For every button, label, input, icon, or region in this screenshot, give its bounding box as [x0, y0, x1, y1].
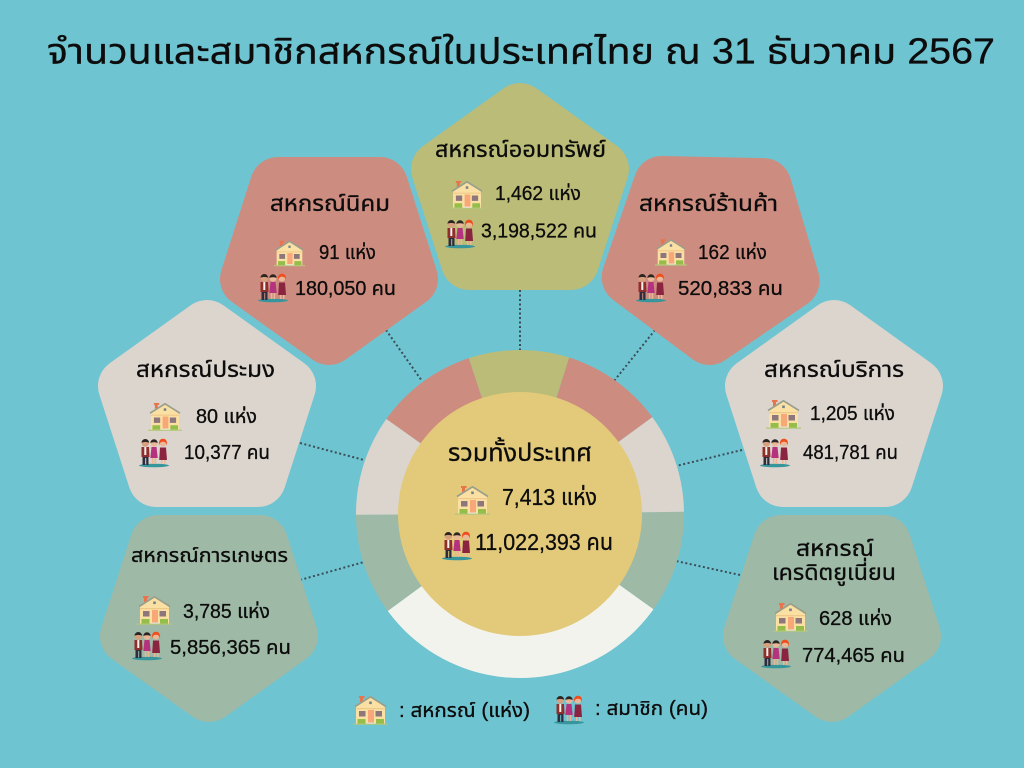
count: members: 5,856,365 คน [170, 637, 291, 659]
legend [353, 696, 708, 725]
ring chart [356, 350, 684, 678]
icon: house [353, 696, 388, 725]
icon: people [445, 220, 475, 248]
icon: house [450, 181, 484, 209]
icon: house [274, 241, 305, 266]
icon: house [137, 596, 172, 625]
legend label: members: : สมาชิก (คน) [595, 698, 708, 720]
icon: people [258, 274, 288, 302]
count: members: 3,198,522 คน [481, 220, 597, 242]
pentagon [128, 543, 290, 694]
count: members: 180,050 คน [295, 278, 396, 300]
heading: สหกรณ์การเกษตร [131, 545, 288, 567]
ring segment: red right [556, 358, 652, 442]
count: cooperatives: 7,413 แห่ง [502, 484, 597, 510]
icon: people [132, 632, 162, 660]
pentagon [439, 111, 601, 262]
icon: people [636, 274, 666, 302]
ring segment: green left [356, 514, 422, 611]
icon: people [442, 532, 472, 560]
heading: สหกรณ์นิคม [270, 191, 390, 216]
pentagon [628, 183, 794, 339]
panel: service cooperative [753, 328, 915, 479]
icon: house [148, 403, 182, 431]
pentagon [126, 328, 288, 479]
panel: credit union cooperative [751, 536, 913, 694]
count: members: 774,465 คน [802, 645, 905, 667]
icon: house [655, 239, 687, 266]
icon: house [766, 400, 801, 429]
connector lines [300, 290, 742, 580]
panel: settlement cooperative [248, 185, 410, 337]
heading: รวมทั้งประเทศ [448, 436, 592, 467]
panel: savings cooperative [435, 111, 606, 262]
icon: people [761, 640, 791, 668]
count: cooperatives: 80 แห่ง [196, 405, 257, 428]
heading: สหกรณ์ประมง [136, 357, 275, 382]
panel: agricultural cooperative [128, 543, 291, 694]
heading line 1: สหกรณ์ [796, 536, 874, 561]
count: cooperatives: 162 แห่ง [698, 241, 767, 264]
pentagon [248, 185, 410, 337]
heading: สหกรณ์ร้านค้า [639, 191, 778, 216]
icon: house [773, 603, 808, 632]
legend label: cooperatives: : สหกรณ์ (แห่ง) [399, 699, 530, 722]
icon: people [554, 696, 584, 724]
ring segment: olive [468, 350, 569, 398]
count: cooperatives: 1,462 แห่ง [495, 182, 581, 205]
ring segment: gray left [356, 419, 420, 515]
count: cooperatives: 1,205 แห่ง [810, 402, 895, 425]
icon: house [455, 486, 490, 515]
heading: สหกรณ์ออมทรัพย์ [435, 137, 606, 162]
count: cooperatives: 91 แห่ง [319, 241, 376, 264]
count: members: 520,833 คน [678, 278, 783, 300]
count: cooperatives: 3,785 แห่ง [183, 600, 270, 623]
icon: people [760, 439, 790, 467]
icon: people [139, 439, 169, 467]
panel: national total [398, 392, 642, 636]
heading: สหกรณ์บริการ [764, 357, 904, 382]
panel: fisheries cooperative [126, 328, 288, 479]
ring segment: gray right [618, 417, 684, 512]
ring segment: green right [620, 512, 684, 609]
count: members: 481,781 คน [803, 442, 898, 464]
panel: store cooperative [628, 183, 794, 339]
ring segment: red left [386, 358, 482, 444]
title: จำนวนและสมาชิกสหกรณ์ในประเทศไทย ณ 31 ธันวาคม 2567 [47, 30, 995, 72]
count: cooperatives: 628 แห่ง [819, 607, 892, 630]
count: members: 11,022,393 คน [475, 529, 613, 555]
pentagon [753, 328, 915, 479]
heading line 2: เครดิตยูเนี่ยน [772, 557, 896, 586]
count: members: 10,377 คน [184, 442, 270, 464]
ring segment: white [388, 584, 654, 678]
center circle [398, 392, 642, 636]
pentagon [751, 543, 913, 694]
